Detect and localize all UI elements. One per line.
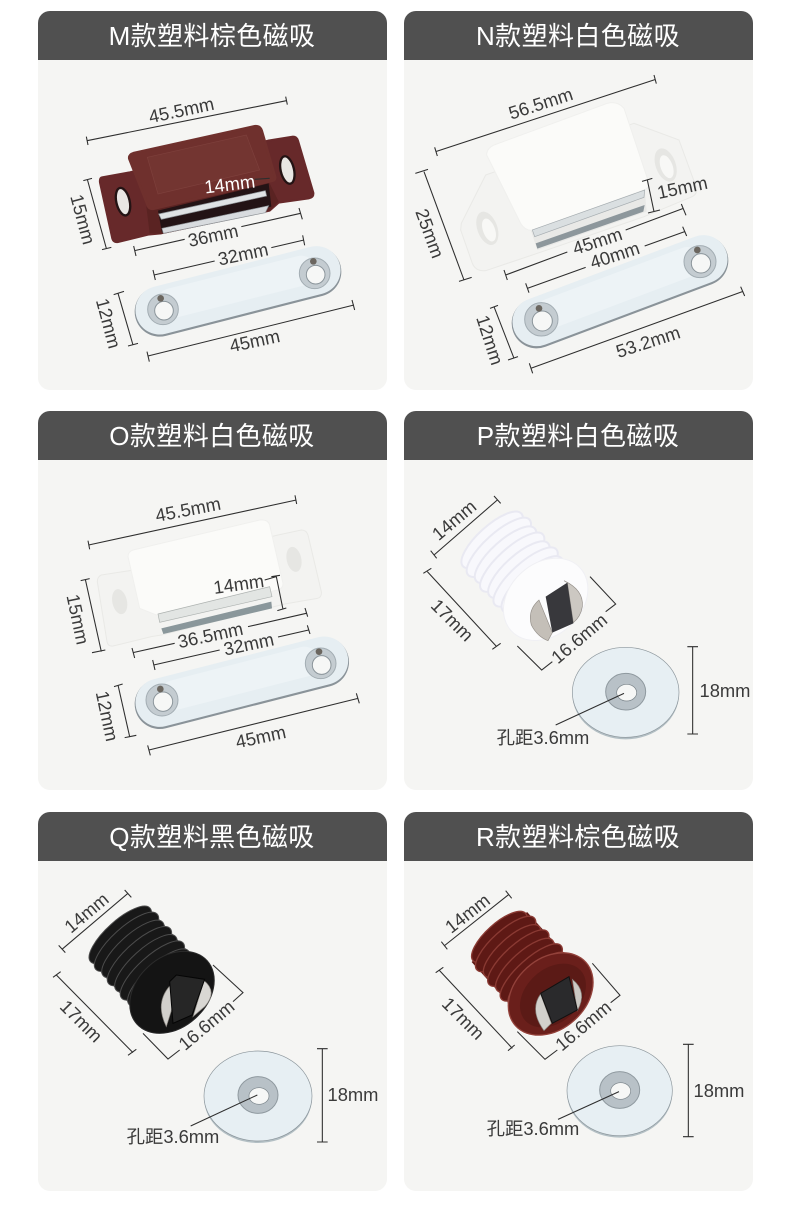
washer	[572, 647, 679, 739]
dimension labels: 45mm	[228, 325, 282, 356]
washer	[204, 1051, 312, 1143]
dimension labels: 16.6mm	[551, 996, 615, 1055]
dimension labels: 18mm	[328, 1084, 378, 1105]
washer	[567, 1046, 672, 1138]
dimension labels: 12mm	[92, 689, 123, 743]
dimension lines	[436, 891, 620, 1119]
panel: M brown plastic magnetic catch	[38, 11, 387, 390]
product and dimensions: R	[436, 889, 744, 1139]
product and dimensions: Q	[53, 888, 378, 1147]
dimension labels: 15mm	[66, 192, 100, 247]
dimension labels: 15mm	[62, 592, 94, 646]
dimension labels: 14mm	[212, 570, 265, 598]
dimension labels: 32mm	[216, 238, 270, 270]
dimension labels: 14mm	[203, 170, 256, 198]
dimension labels: 36mm	[186, 220, 240, 251]
dimension labels: 15mm	[655, 172, 709, 203]
dimension labels: 18mm	[694, 1080, 744, 1101]
cylinder magnet: black	[75, 893, 231, 1051]
panel: Q black plastic cylindrical magnet	[38, 812, 387, 1191]
dimension labels: 32mm	[222, 628, 276, 660]
dimension labels: 14mm	[428, 496, 480, 544]
dimension labels: 17mm	[56, 996, 107, 1046]
panel: R brown plastic cylindrical magnet	[404, 812, 753, 1191]
cylinder magnet: brown	[455, 895, 610, 1053]
dimension labels: 孔距3.6mm	[487, 1118, 579, 1139]
dimension labels: 16.6mm	[174, 996, 238, 1054]
dimension labels: 40mm	[587, 237, 642, 273]
heading: O: O款塑料白色磁吸	[109, 421, 315, 451]
dimension lines	[415, 75, 745, 373]
catch body: white	[97, 520, 321, 646]
dimension labels: 45.5mm	[153, 493, 223, 526]
dimension labels: 孔距3.6mm	[127, 1126, 219, 1147]
dimension labels: 14mm	[60, 888, 113, 937]
dimension labels: 12mm	[472, 313, 508, 367]
heading: Q: Q款塑料黑色磁吸	[109, 822, 315, 852]
product and dimensions: O	[62, 493, 359, 755]
dimension labels: 56.5mm	[506, 83, 575, 124]
dimension labels: 17mm	[438, 993, 489, 1044]
dimension labels: 16.6mm	[547, 609, 611, 668]
heading: O	[38, 411, 387, 460]
dimension labels	[427, 496, 750, 748]
dimension labels: 17mm	[427, 595, 478, 645]
dimension labels: 45mm	[570, 223, 625, 259]
mounting plate	[148, 258, 330, 325]
dimension labels	[411, 83, 709, 367]
dimension labels: 18mm	[700, 680, 750, 701]
dimension lines	[81, 495, 359, 755]
heading: Q	[38, 812, 387, 861]
heading: N	[404, 11, 753, 60]
mounting plate	[525, 246, 716, 336]
cylinder magnet: white	[448, 498, 604, 657]
dimension labels: 孔距3.6mm	[497, 727, 589, 748]
dimension lines	[83, 97, 355, 362]
dimension lines	[53, 890, 257, 1126]
dimension labels: 45.5mm	[147, 93, 216, 127]
heading: N: N款塑料白色磁吸	[476, 21, 680, 51]
heading: P: P款塑料白色磁吸	[477, 421, 679, 451]
dimension labels	[66, 93, 282, 356]
product and dimensions: M	[66, 93, 355, 362]
dimension labels: 36.5mm	[176, 618, 245, 652]
dimension labels: 25mm	[411, 206, 449, 261]
heading: R	[404, 812, 753, 861]
panel: N white plastic magnetic catch	[404, 11, 753, 390]
dimension labels	[56, 888, 378, 1147]
dimension labels	[62, 493, 288, 752]
dimension labels	[438, 889, 744, 1139]
product and dimensions: N	[411, 75, 745, 373]
panel: P white plastic cylindrical magnet	[404, 411, 753, 790]
mounting plate	[146, 648, 336, 716]
dimension labels: 12mm	[92, 296, 125, 351]
dimension lines	[423, 496, 624, 725]
heading: R: R款塑料棕色磁吸	[476, 822, 680, 852]
heading: M: M款塑料棕色磁吸	[109, 21, 315, 51]
catch body: white	[461, 103, 697, 271]
dimension labels: 53.2mm	[613, 321, 683, 362]
panel: O white plastic magnetic catch	[38, 411, 387, 790]
product and dimensions: P	[423, 496, 750, 748]
heading: P	[404, 411, 753, 460]
catch body: brown	[100, 126, 313, 242]
dimension labels: 14mm	[441, 889, 494, 937]
dimension labels: 45mm	[234, 721, 288, 752]
heading: M	[38, 11, 387, 60]
